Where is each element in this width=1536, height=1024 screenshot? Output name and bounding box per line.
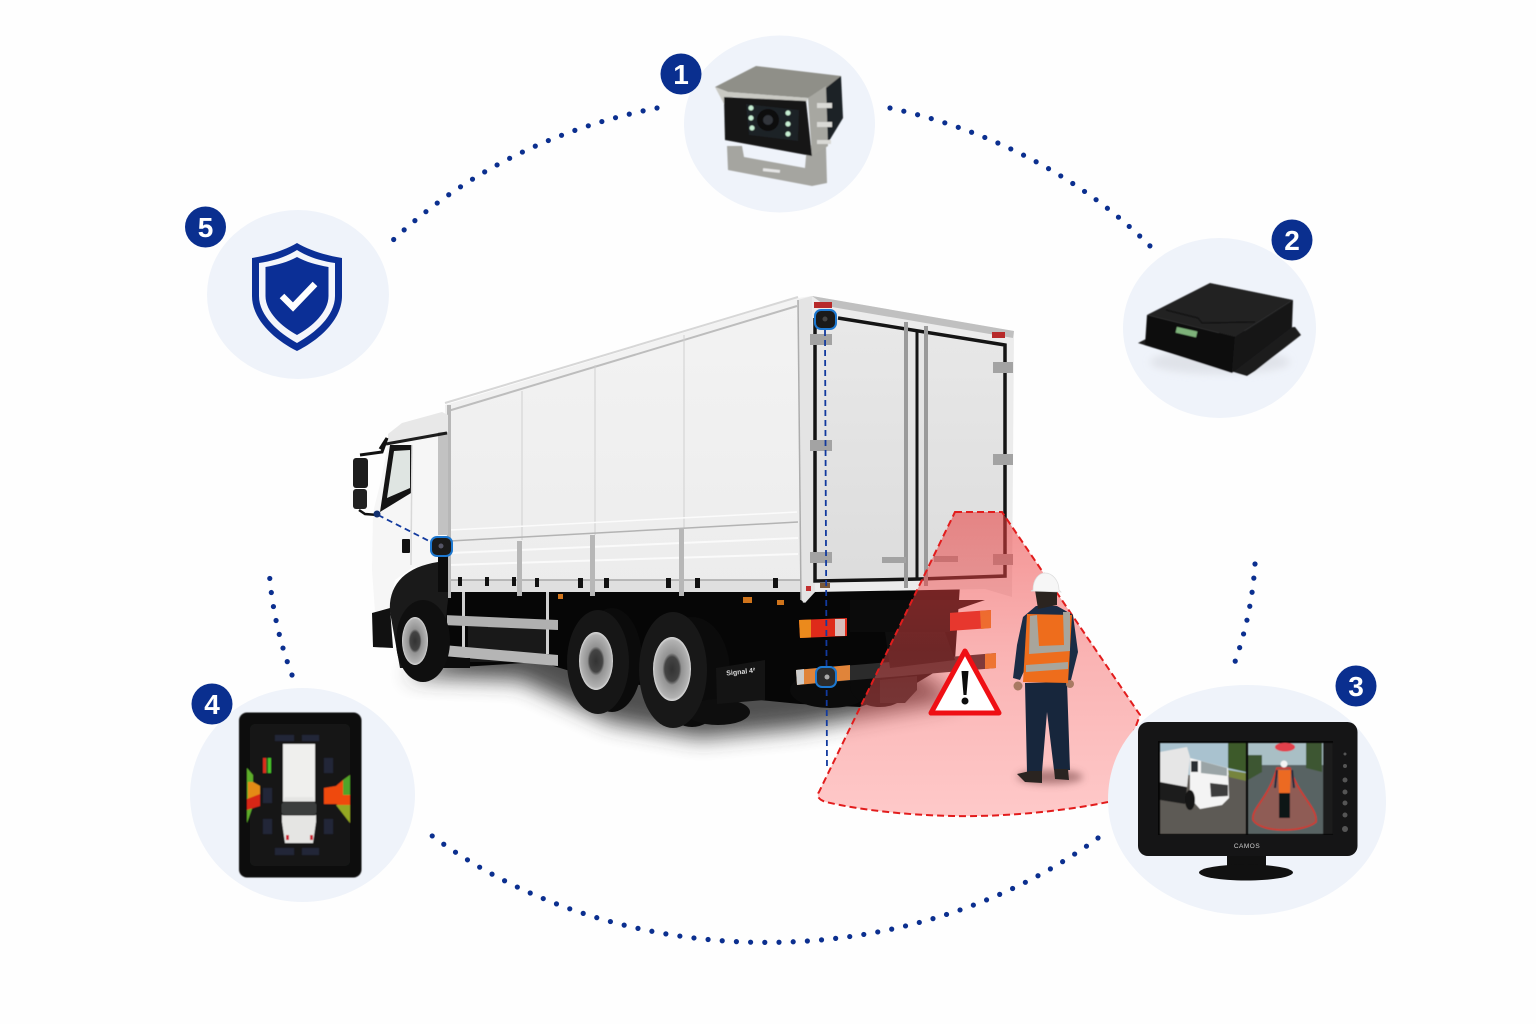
badge 3 [1336,666,1376,706]
cargo box side [445,296,815,603]
blue sight lines [378,330,827,770]
left camera view [1160,743,1246,834]
chassis [435,585,960,707]
icon: black control unit [1138,283,1301,376]
number badges [185,54,1376,724]
badge 4 [192,684,232,724]
badge 5 [185,206,226,248]
icon: rear camera [715,66,843,186]
rear wheels [567,608,910,728]
right camera view [1248,742,1333,834]
icon: monitor [1138,722,1358,880]
truck [353,296,1014,728]
mirrors [353,438,387,515]
badge 2 [1272,220,1312,260]
icon: shield with check [252,243,342,351]
warning triangle [931,651,999,713]
badge 3: 3 [1348,671,1364,702]
icon: monitor: CAMOS [1234,843,1260,850]
rear lights and bumper [796,600,996,703]
dotted connection ring [269,108,1255,942]
red detection zone [818,512,1140,816]
badge 2: 2 [1284,225,1300,256]
worker [1013,573,1083,784]
panel: component 1 camera [684,36,875,212]
panel: component 3 monitor [1108,685,1386,915]
mudflap: Signal 4² [726,667,756,678]
front wheel [396,600,450,682]
cab [353,412,448,668]
heat zones [247,758,350,823]
badge 1 [660,54,702,94]
panel: component 2 control box [1123,238,1316,418]
camera markers [374,310,836,687]
badge 5: 5 [198,212,213,243]
panel: component 5 shield [207,210,389,379]
rear doors [806,296,1014,597]
badge 1: 1 [673,59,689,90]
truck ground shadow [405,630,960,738]
truck top view [281,744,317,843]
icon: top-down display [239,712,362,878]
badge 4: 4 [204,689,220,720]
mudflap [716,660,765,704]
panel: component 4 surround view [190,688,415,902]
